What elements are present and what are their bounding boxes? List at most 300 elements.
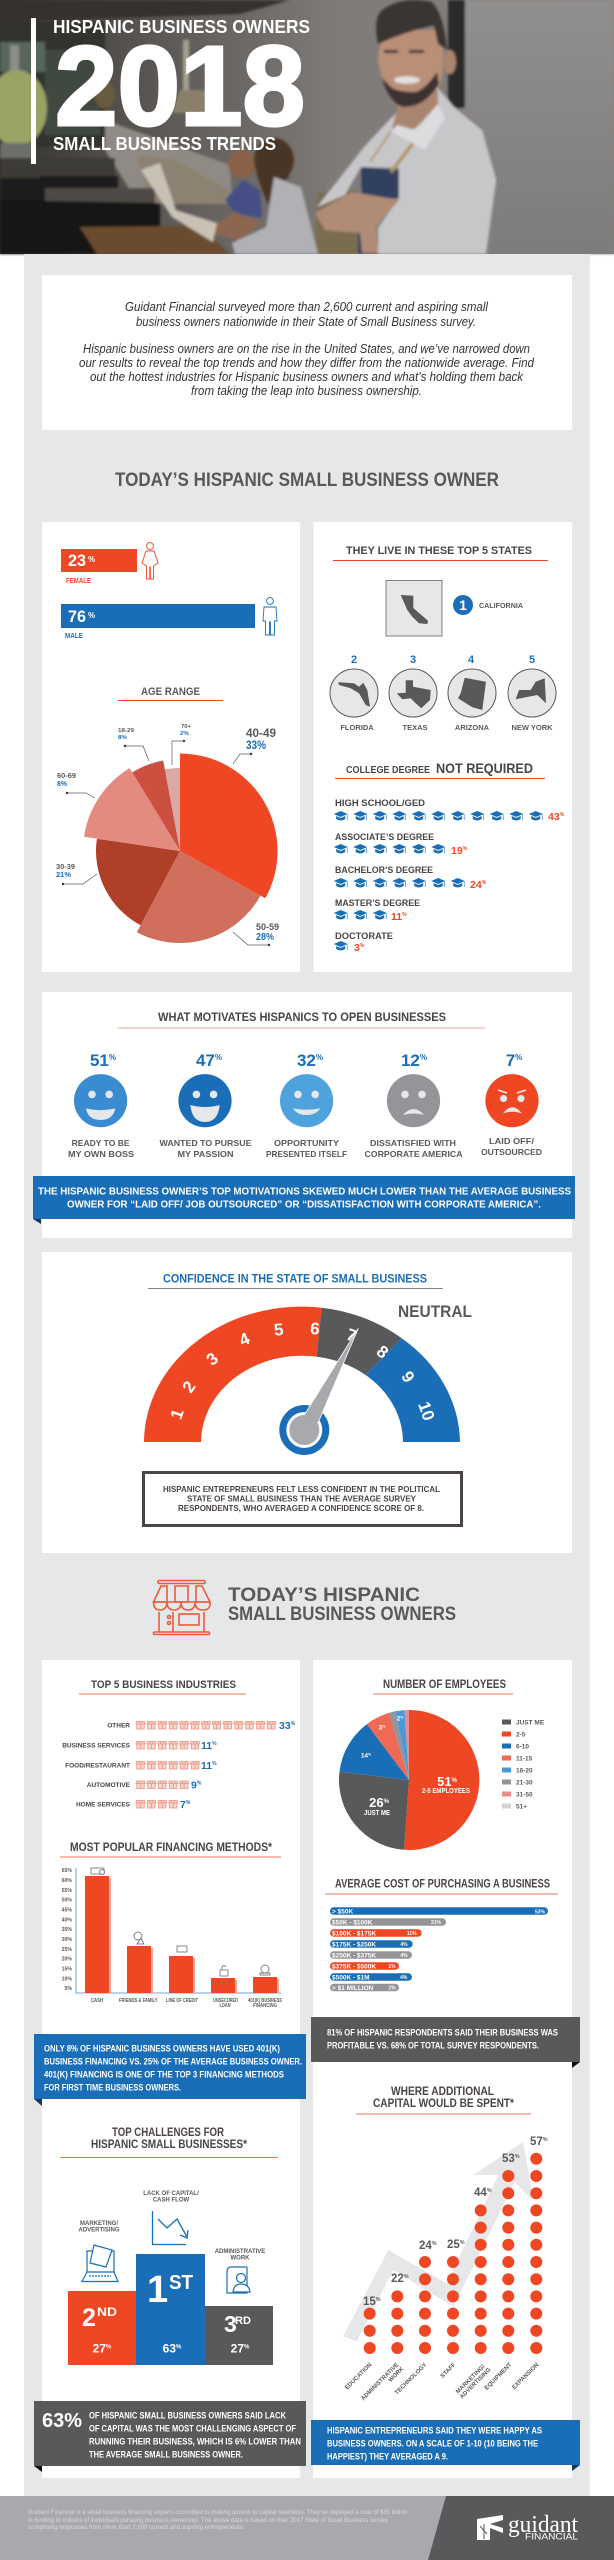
chart: financing methods bars: UNSECURED <box>213 1998 238 2004</box>
industry row: automotive: 9 <box>191 1780 197 1792</box>
icon: female figure <box>142 543 158 579</box>
chart: financing methods bars: 15% <box>62 1966 72 1972</box>
callout: happiness note: HISPANIC ENTREPRENEURS SAID THEY WERE HAPPY AS <box>327 2426 542 2436</box>
degree: bachelor's: % <box>482 880 487 886</box>
icons: financing methods <box>91 1868 270 1976</box>
chart: gauge arc <box>144 1307 460 1442</box>
podium: 1st: 63 <box>163 2342 176 2356</box>
chart: gauge arc: 4 <box>237 1329 253 1350</box>
challenge labels: CASH FLOW <box>153 2198 190 2204</box>
callout: profitable business note: PROFITABLE VS. 68% OF TOTAL SURVEY RESPONDENTS. <box>327 2040 539 2052</box>
age range heading <box>118 686 223 700</box>
degree: associate's <box>334 832 468 857</box>
industry row: other: % <box>291 1721 296 1727</box>
chart: employees pie: JUST ME <box>364 1810 390 1817</box>
state: California rank 1: 1 <box>459 597 467 613</box>
callout: motivations note: OWNER FOR “LAID OFF/ JOB OUTSOURCED” OR “DISSATISFACTION WITH CORPORATE AMERICA”. <box>67 1200 541 1210</box>
male bar <box>61 604 255 640</box>
industry row: business services <box>62 1740 217 1752</box>
label: 70+ <box>172 724 191 765</box>
icon: male figure <box>263 598 277 635</box>
chart: purchase cost bars: 11% <box>407 1931 417 1937</box>
label: 60-69: 8% <box>57 779 67 788</box>
heading: number of employees: NUMBER OF EMPLOYEES <box>383 1679 506 1691</box>
chart: employees pie: 26 <box>369 1795 384 1810</box>
male bar: MALE <box>65 633 83 640</box>
chart: purchase cost bars: 1% <box>388 1964 396 1970</box>
motivation 7%: LAID OFF/ <box>489 1136 535 1146</box>
state: Arizona rank 4: ARIZONA <box>455 723 490 732</box>
podium: 3rd: RD <box>235 2315 251 2327</box>
heading: college degree not required: NOT REQUIRED <box>436 760 533 776</box>
footer disclaimer text: in funding to millions of individuals pursuing business ownership. The above data is based on their 2017 State of Small Business survey, <box>28 2517 389 2524</box>
section heading with storefront icon: SMALL BUSINESS OWNERS <box>228 1604 456 1625</box>
panel: intro text: from taking the leap into business ownership. <box>191 383 422 398</box>
label: 70+: 2% <box>180 731 189 737</box>
chart: financing methods bars: LINE OF CREDIT <box>166 1998 199 2004</box>
callout: motivations note: THE HISPANIC BUSINESS OWNER’S TOP MOTIVATIONS SKEWED MUCH LOWER THAN THE AVERAGE BUSINESS <box>38 1186 571 1198</box>
chart: financing methods bars: 65% <box>62 1868 72 1874</box>
panel: top states and college degree <box>314 522 572 972</box>
motivation 12%: 12 <box>401 1051 420 1070</box>
motivation 12%: CORPORATE AMERICA <box>364 1149 462 1159</box>
gauge needle and hub <box>279 1328 358 1455</box>
label: 18-29: 8% <box>118 735 127 741</box>
panel: intro text <box>42 275 572 430</box>
female bar: FEMALE <box>66 578 91 585</box>
motivation 12% <box>364 1051 462 1159</box>
callout: happiness note <box>311 2420 580 2471</box>
chart: purchase cost bars: $175K - $250K <box>332 1942 376 1948</box>
dot column percentages: 25 <box>447 2239 460 2251</box>
degree: master's: MASTER’S DEGREE <box>335 898 420 909</box>
motivation 51%: % <box>109 1053 116 1062</box>
callout: 63% lack of capital: 63% <box>42 2410 82 2432</box>
dot column percentages: % <box>487 2188 492 2194</box>
label: 40-49: 40-49 <box>246 726 276 740</box>
dot column category labels: MARKETING/ <box>455 2364 487 2395</box>
heading: college degree not required: COLLEGE DEGREE <box>346 765 430 776</box>
heading: average cost of purchasing: AVERAGE COST OF PURCHASING A BUSINESS <box>335 1876 550 1890</box>
label: 50-59: 50-59 <box>256 922 279 933</box>
state: Texas rank 3 <box>389 654 437 732</box>
panel: intro text: business owners nationwide in their State of Small Business survey. <box>136 314 476 329</box>
state: Texas rank 3: TEXAS <box>402 723 428 732</box>
motivation 12%: % <box>420 1053 427 1062</box>
icon: profile book <box>227 2267 250 2293</box>
callout: 63% lack of capital: OF CAPITAL WAS THE MOST CHALLENGING ASPECT OF <box>89 2424 296 2434</box>
chart: employees pie: 2-5 EMPLOYEES <box>422 1788 470 1795</box>
chart: gauge arc: 7 <box>344 1325 359 1346</box>
callout: profitable business note: 81% OF HISPANIC RESPONDENTS SAID THEIR BUSINESS WAS <box>327 2028 558 2038</box>
callout: 401(k) financing note: ONLY 8% OF HISPANIC BUSINESS OWNERS HAVE USED 401(K) <box>44 2044 280 2054</box>
dot column category labels: EQUIPMENT <box>484 2362 514 2392</box>
legend: employees: 21-30 <box>516 1780 533 1786</box>
heading: where additional capital would be spent: CAPITAL WOULD BE SPENT* <box>373 2098 514 2110</box>
male bar: % <box>88 611 95 620</box>
state: Florida rank 2: FLORIDA <box>340 723 374 732</box>
degree: high school: 43 <box>548 811 560 823</box>
dot column percentages: 44 <box>474 2187 487 2199</box>
label: 50-59 <box>233 922 279 946</box>
podium: 2nd: ND <box>97 2305 117 2319</box>
chart: financing methods bars: FINANCING <box>253 2003 277 2009</box>
podium: 3rd: 3 <box>224 2311 237 2337</box>
chart: financing methods bars: FRIENDS & FAMILY <box>119 1998 158 2004</box>
label: 70+: 70+ <box>181 724 191 730</box>
icon: declining chart <box>152 2211 188 2244</box>
industry row: automotive <box>87 1780 202 1792</box>
dot column percentages <box>363 2136 548 2308</box>
callout: 63% lack of capital: THE AVERAGE SMALL BUSINESS OWNER. <box>89 2450 243 2460</box>
chart: purchase cost bars: 4% <box>400 1942 408 1948</box>
chart: financing methods bars: 20% <box>62 1956 72 1962</box>
motivation 32%: OPPORTUNITY <box>274 1138 339 1148</box>
degree: doctorate: % <box>360 943 365 949</box>
chart: financing methods bars: 401(K) BUSINESS <box>248 1998 282 2004</box>
motivation 51% <box>68 1051 134 1159</box>
chart: gauge arc: 5 <box>273 1320 284 1340</box>
heading: number of employees <box>373 1679 513 1694</box>
heading: top challenges: HISPANIC SMALL BUSINESSES* <box>91 2139 247 2151</box>
callout: 401(k) financing note: 401(K) FINANCING IS ONE OF THE TOP 3 FINANCING METHODS <box>44 2070 284 2080</box>
motivation 47%: 47 <box>196 1051 215 1070</box>
chart: financing methods bars: 25% <box>62 1947 72 1953</box>
chart: employees pie: 2 <box>397 1716 400 1722</box>
state: New York rank 5: 5 <box>529 654 535 666</box>
industry row: home services: % <box>186 1800 191 1806</box>
podium: 2nd: % <box>106 2344 112 2350</box>
chart: financing methods bars: 10% <box>62 1976 72 1982</box>
panel: intro text: Guidant Financial surveyed more than 2,600 current and aspiring small <box>125 299 489 314</box>
state: New York rank 5: NEW YORK <box>511 723 553 732</box>
dot column category labels: EDUCATION <box>344 2362 373 2391</box>
chart: gauge arc: 6 <box>309 1319 321 1339</box>
dot column percentages: 57 <box>530 2136 543 2148</box>
age range heading: AGE RANGE <box>141 686 200 698</box>
legend: employees: 6-10 <box>516 1744 529 1750</box>
legend: employees <box>502 1720 545 1810</box>
motivation 47%: WANTED TO PURSUE <box>160 1138 252 1148</box>
label: 30-39 <box>56 862 97 885</box>
label: 60-69: 60-69 <box>57 771 76 780</box>
podium: 1st <box>136 2254 205 2365</box>
chart: purchase cost bars: 1% <box>388 1986 396 1992</box>
state: New York rank 5 <box>508 654 556 732</box>
chart: financing methods bars: 50% <box>62 1898 72 1904</box>
industry row: home services: 7 <box>180 1799 186 1811</box>
label: 40-49 <box>233 726 276 764</box>
heading: most popular financing methods: MOST POPULAR FINANCING METHODS* <box>70 1842 272 1854</box>
chart: gauge arc: 10 <box>414 1399 438 1423</box>
panel: industries, financing, challenges <box>34 1660 306 2478</box>
chart: financing methods bars: 35% <box>62 1927 72 1933</box>
heading: college degree not required <box>335 760 545 778</box>
industry row: other: OTHER <box>107 1722 130 1730</box>
icon: storefront <box>154 1580 210 1634</box>
chart: purchase cost bars: 21% <box>431 1920 442 1926</box>
challenge labels <box>78 2191 265 2262</box>
female bar: % <box>88 555 95 564</box>
degree: doctorate: 3 <box>354 942 360 954</box>
callout: 63% lack of capital: OF HISPANIC SMALL BUSINESS OWNERS SAID LACK <box>89 2410 286 2422</box>
callout: confidence note: HISPANIC ENTREPRENEURS FELT LESS CONFIDENT IN THE POLITICAL <box>163 1484 440 1494</box>
motivation 7% <box>481 1051 542 1157</box>
chart: financing methods bars <box>62 1868 282 2009</box>
label: 30-39: 30-39 <box>56 862 75 871</box>
callout: profitable business note <box>311 2017 580 2068</box>
dot column category labels: EXPANSION <box>511 2362 540 2391</box>
industry row: other: 33 <box>279 1720 291 1732</box>
chart: purchase cost bars: $100K - $175K <box>332 1930 376 1938</box>
chart: age range pie <box>84 754 278 943</box>
legend: employees: 51+ <box>516 1804 527 1810</box>
podium: 2nd: 27 <box>93 2342 106 2356</box>
chart: dot columns <box>364 2153 542 2354</box>
degree: high school <box>334 798 565 823</box>
panel: intro text: our results to reveal the top trends and how they differ from the nationwide average. Find <box>79 355 535 370</box>
chart: employees pie: 14 <box>361 1752 368 1760</box>
dot column category labels: ADMINISTRATIVE <box>360 2362 400 2402</box>
heading: where additional capital would be spent: WHERE ADDITIONAL <box>391 2086 494 2098</box>
heading: top 5 business industries: TOP 5 BUSINESS INDUSTRIES <box>91 1679 236 1691</box>
state: Florida rank 2: 2 <box>351 654 357 666</box>
state: California rank 1: CALIFORNIA <box>479 601 524 610</box>
chart: purchase cost bars: $375K - $500K <box>332 1964 376 1970</box>
heading: where additional capital would be spent <box>356 2086 531 2114</box>
dot column percentages: % <box>376 2297 381 2303</box>
footer disclaimer text: Guidant Financial is a small business financing experts committed to making access to capital seamless. They’ve deployed a total of $35 billion <box>28 2509 408 2516</box>
arrow: rising trend background <box>343 2142 533 2342</box>
degree: bachelor's: BACHELOR’S DEGREE <box>335 865 433 876</box>
heading: confidence: CONFIDENCE IN THE STATE OF SMALL BUSINESS <box>163 1272 427 1286</box>
footer disclaimer text <box>28 2509 408 2531</box>
degree: bachelor's: 24 <box>470 879 482 891</box>
panel: motivations <box>33 992 575 1238</box>
label: 40-49: 33% <box>246 738 266 752</box>
panel: intro text: out the hottest industries for Hispanic business owners and what’s holding them back <box>90 369 524 384</box>
industry row: food/restaurant: % <box>212 1761 217 1767</box>
chart: employees pie <box>339 1710 479 1850</box>
motivation 7%: % <box>515 1053 522 1062</box>
motivation 32% <box>266 1051 347 1159</box>
female bar: 23 <box>68 551 86 570</box>
challenge labels: ADVERTISING <box>78 2228 120 2234</box>
footer disclaimer text: comprising responses from more than 2,600 current and aspiring entrepreneurs. <box>28 2524 245 2531</box>
chart: purchase cost bars: > $50K <box>332 1908 353 1916</box>
industry row: home services: HOME SERVICES <box>76 1802 131 1808</box>
chart: employees pie: 51 <box>437 1774 452 1789</box>
motivation 47%: % <box>215 1053 222 1062</box>
degree: associate's: ASSOCIATE’S DEGREE <box>335 832 434 843</box>
callout: happiness note: BUSINESS OWNERS. ON A SCALE OF 1-10 (10 BEING THE <box>327 2438 538 2450</box>
degree: high school: HIGH SCHOOL/GED <box>335 798 425 809</box>
motivation 32%: % <box>316 1053 323 1062</box>
chart: purchase cost bars: $500K - $1M <box>332 1974 370 1982</box>
degree: doctorate: DOCTORATE <box>335 931 393 942</box>
chart: gauge arc: 8 <box>373 1342 392 1362</box>
chart: financing methods bars: CASH <box>91 1998 103 2004</box>
label: 30-39: 21% <box>56 870 71 879</box>
state: California rank 1 <box>386 580 524 636</box>
chart: financing methods bars: 55% <box>62 1888 72 1894</box>
chart: financing methods bars: 40% <box>62 1918 72 1924</box>
industry row: business services: BUSINESS SERVICES <box>62 1742 131 1750</box>
section heading with storefront icon <box>154 1580 456 1634</box>
dot column category labels: TECHNOLOGY <box>394 2362 428 2396</box>
chart: purchase cost bars: > $1 MILLION <box>332 1985 374 1992</box>
title block: 2018 <box>55 23 305 149</box>
industry row: home services <box>76 1799 191 1811</box>
chart: gauge arc: 3 <box>203 1349 222 1369</box>
hero photo: business owner in restaurant <box>0 0 614 254</box>
female bar <box>61 549 137 585</box>
label: 60-69 <box>57 771 95 798</box>
callout: confidence note <box>144 1472 462 1526</box>
motivation 32%: PRESENTED ITSELF <box>266 1149 347 1159</box>
callout: confidence note: STATE OF SMALL BUSINESS THAN THE AVERAGE SURVEY <box>187 1494 416 1504</box>
degree: high school: % <box>560 812 565 818</box>
callout: 63% lack of capital <box>34 2401 306 2472</box>
dot column category labels: ADVERTISING <box>459 2367 493 2400</box>
chart: financing methods bars: 30% <box>62 1937 72 1943</box>
chart: gauge arc: 2 <box>179 1378 200 1396</box>
label: 50-59: 28% <box>256 932 274 943</box>
label: 18-29: 18-29 <box>118 728 134 734</box>
callout: 401(k) financing note: BUSINESS FINANCING VS. 25% OF THE AVERAGE BUSINESS OWNER. <box>44 2056 302 2068</box>
industry row: other <box>107 1720 296 1732</box>
degree: associate's: 19 <box>451 845 463 857</box>
chart: employees pie: % <box>368 1752 372 1756</box>
panel: confidence gauge <box>42 1252 572 1553</box>
dot column percentages: % <box>404 2274 409 2280</box>
dot column percentages: % <box>432 2241 437 2247</box>
callout: 63% lack of capital: RUNNING THEIR BUSINESS, WHICH IS 6% LOWER THAN <box>89 2436 301 2448</box>
state: Arizona rank 4 <box>448 654 496 732</box>
podium: 3rd: % <box>244 2344 250 2350</box>
dot column percentages: % <box>543 2137 548 2143</box>
footer <box>0 2496 614 2560</box>
chart: purchase cost bars <box>330 1907 548 1992</box>
callout: 401(k) financing note: FOR FIRST TIME BUSINESS OWNERS. <box>44 2082 181 2094</box>
degree: master's: % <box>402 912 407 918</box>
heading: today's Hispanic small business owner: TODAY’S HISPANIC SMALL BUSINESS OWNER <box>115 470 499 491</box>
legend: employees: 16-20 <box>516 1768 533 1774</box>
dot column percentages: 22 <box>391 2273 404 2285</box>
heading: top challenges: TOP CHALLENGES FOR <box>112 2127 225 2139</box>
dot column percentages: 15 <box>363 2296 376 2308</box>
chart: gauge arc: 9 <box>397 1368 418 1386</box>
industry row: food/restaurant: FOOD/RESTAURANT <box>65 1762 130 1770</box>
dot column percentages: % <box>515 2154 520 2160</box>
motivation 51%: READY TO BE <box>72 1138 130 1148</box>
challenge labels: ADMINISTRATIVE <box>215 2249 265 2255</box>
logo: Guidant Financial: guidant <box>508 2512 578 2538</box>
degree: bachelor's <box>334 865 487 891</box>
podium: 3rd: 27 <box>231 2342 244 2356</box>
logo: Guidant Financial <box>477 2512 578 2542</box>
label: 18-29 <box>118 728 149 761</box>
callout: motivations note <box>33 1176 575 1224</box>
degree: associate's: % <box>463 846 468 852</box>
motivation 32%: 32 <box>297 1051 316 1070</box>
section heading with storefront icon: TODAY’S HISPANIC <box>228 1585 420 1606</box>
chart: employees pie: % <box>382 1724 386 1728</box>
chart: purchase cost bars: $250K - $375K <box>332 1952 376 1960</box>
dot column percentages: 24 <box>419 2240 432 2252</box>
heading: top challenges <box>60 2127 278 2158</box>
motivation 47%: MY PASSION <box>178 1149 234 1159</box>
icon: laptop <box>82 2245 118 2282</box>
state: Florida rank 2 <box>330 654 378 732</box>
chart: financing methods bars: LOAN <box>220 2003 231 2009</box>
podium: 1st: ST <box>169 2272 193 2294</box>
state: Arizona rank 4: 4 <box>468 654 475 666</box>
podium: 1st: 1 <box>147 2269 168 2311</box>
dot column percentages: 53 <box>502 2153 515 2165</box>
callout: 401(k) financing note <box>34 2034 306 2106</box>
panel: employees, purchase cost, additional capital <box>311 1660 580 2478</box>
degree: master's <box>334 898 420 923</box>
motivation 7%: OUTSOURCED <box>481 1147 542 1157</box>
podium: 2nd: 2 <box>82 2304 96 2332</box>
industry row: business services: 11 <box>201 1740 212 1752</box>
dot column category labels: WORK <box>388 2366 406 2384</box>
podium: 1st: % <box>176 2344 182 2350</box>
callout: happiness note: HAPPIEST) THEY AVERAGED A 9. <box>327 2452 448 2462</box>
chart: purchase cost bars: $50K - $100K <box>332 1920 373 1926</box>
panel: gender and age <box>42 522 300 972</box>
panel: intro text: Hispanic business owners are on the rise in the United States, and we’ve narrowed down <box>83 341 530 356</box>
chart: purchase cost bars: 4% <box>400 1953 408 1959</box>
podium: 3rd <box>205 2306 273 2365</box>
chart: purchase cost bars: 4% <box>400 1975 408 1981</box>
legend: employees: 2-5 <box>516 1732 526 1738</box>
chart: employees pie: % <box>400 1716 404 1720</box>
dot column category labels: STAFF <box>440 2362 458 2380</box>
industry row: automotive: AUTOMOTIVE <box>87 1782 131 1789</box>
dot column percentages: % <box>460 2240 465 2246</box>
heading: what motivates: WHAT MOTIVATES HISPANICS TO OPEN BUSINESSES <box>158 1012 446 1024</box>
industry row: food/restaurant: 11 <box>201 1760 212 1772</box>
chart: employees pie: % <box>384 1799 390 1805</box>
gauge label: neutral: NEUTRAL <box>398 1302 472 1321</box>
legend: employees: JUST ME <box>516 1720 545 1726</box>
callout: confidence note: RESPONDENTS, WHO AVERAGED A CONFIDENCE SCORE OF 8. <box>178 1503 424 1513</box>
industry row: automotive: % <box>197 1780 202 1786</box>
state: Texas rank 3: 3 <box>410 654 416 666</box>
chart: financing methods bars: 45% <box>62 1908 72 1914</box>
motivation 12%: DISSATISFIED WITH <box>370 1138 456 1148</box>
chart: employees pie: % <box>452 1778 458 1784</box>
male bar: 76 <box>68 607 86 626</box>
motivation 51%: 51 <box>90 1051 109 1070</box>
challenge labels: MARKETING/ <box>80 2221 118 2227</box>
chart: employees pie: 3 <box>379 1724 382 1732</box>
degree: master's: 11 <box>391 911 402 923</box>
chart: financing methods bars: 60% <box>62 1878 72 1884</box>
motivation 7%: 7 <box>506 1051 515 1070</box>
chart: gauge arc: 1 <box>167 1407 188 1422</box>
legend: employees: 31-50 <box>516 1792 533 1798</box>
motivation 51%: MY OWN BOSS <box>68 1149 134 1159</box>
chart: financing methods bars: 5% <box>64 1986 72 1992</box>
challenge labels: WORK <box>230 2256 250 2262</box>
logo: Guidant Financial: FINANCIAL <box>525 2532 578 2542</box>
industry row: food/restaurant <box>65 1760 217 1772</box>
title block: SMALL BUSINESS TRENDS <box>53 134 276 154</box>
degree: doctorate <box>334 931 393 954</box>
